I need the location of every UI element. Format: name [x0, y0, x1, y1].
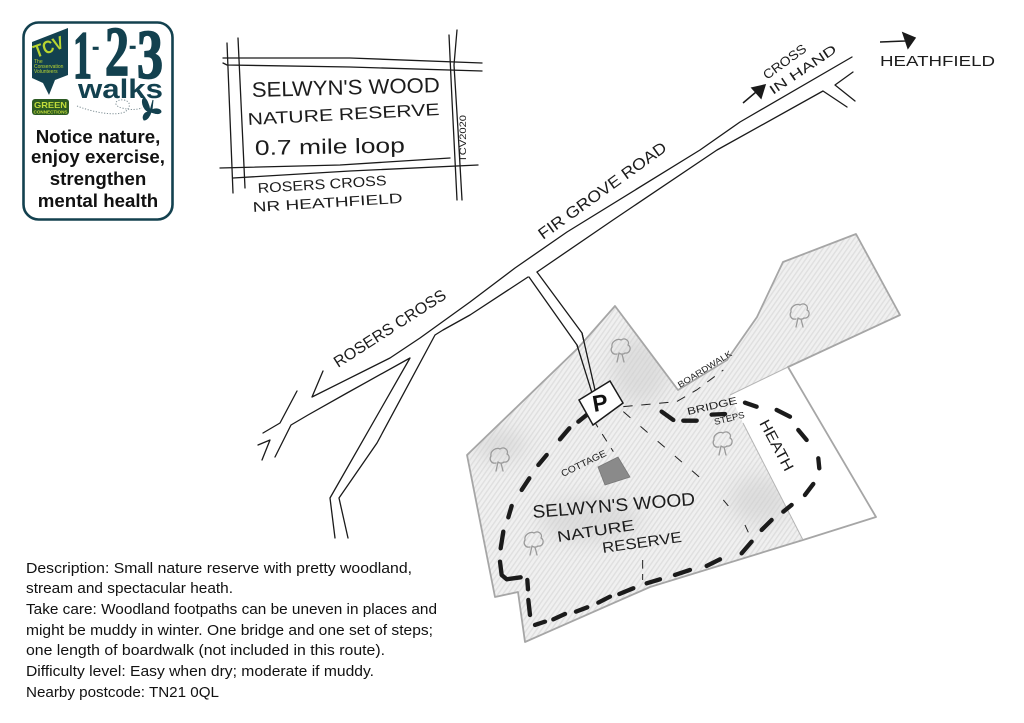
- tree icons: [490, 304, 809, 555]
- text block: route description: Take care: Woodland footpaths can be uneven in places and: [26, 601, 437, 618]
- subtitle text: NATURE RESERVE: [247, 100, 440, 129]
- slogan: mental health: [38, 190, 158, 211]
- slogan: strengthen: [50, 168, 146, 189]
- heath boundary: [730, 367, 803, 540]
- logo panel: 1-2-3 walks: [24, 14, 172, 220]
- icon: tree: [524, 532, 543, 555]
- reserve boundary: [467, 234, 900, 642]
- label: Steps: STEPS: [713, 410, 746, 427]
- slogan: enjoy exercise,: [31, 146, 165, 167]
- road network: [258, 57, 855, 538]
- side road at east end: [835, 72, 855, 101]
- direction: Heathfield: HEATHFIELD: [880, 53, 995, 70]
- direction: Cross in Hand: [743, 41, 839, 103]
- arrow: to Cross in Hand: [743, 85, 765, 103]
- badge: green connections: CONNECTIONS: [34, 110, 68, 114]
- road label: Fir Grove Road: FIR GROVE ROAD: [535, 139, 670, 243]
- wordmark: 1-2-3: 3: [137, 17, 163, 94]
- icon: TCV marker: TCV: [31, 32, 66, 62]
- slogan: Notice nature,: [36, 126, 160, 147]
- car park sign: P: [590, 389, 610, 417]
- location text 2: NR HEATHFIELD: [252, 190, 403, 215]
- location text: ROSERS CROSS: [257, 172, 387, 196]
- label: Boardwalk: BOARDWALK: [676, 348, 734, 390]
- text block: route description: might be muddy in winter. One bridge and one set of steps;: [26, 622, 433, 639]
- walking route: [500, 403, 819, 625]
- cottage: [598, 457, 630, 485]
- distance text: 0.7 mile loop: [255, 134, 405, 160]
- access road over reserve: [577, 333, 595, 393]
- arrow: to Heathfield: [880, 33, 915, 48]
- direction: Cross in Hand: IN HAND: [766, 41, 839, 97]
- Fir Grove Road lower edge: [275, 358, 410, 538]
- icon: tree: [713, 432, 732, 455]
- icon: tree: [611, 339, 630, 362]
- label: Bridge: BRIDGE: [686, 396, 739, 418]
- frame road lines: [220, 30, 482, 200]
- title text: SELWYN'S WOOD: [252, 74, 440, 102]
- wordmark: 1-2-3: -: [93, 39, 98, 56]
- west junction: [258, 391, 297, 460]
- icon: TCV marker: The: [34, 59, 43, 65]
- slogan: [31, 126, 165, 211]
- road label: Rosers Cross: ROSERS CROSS: [331, 287, 450, 371]
- credit text: TCV2020: [458, 115, 468, 162]
- car park sign: [579, 381, 623, 425]
- badge: green connections: GREEN: [34, 100, 67, 110]
- icon: TCV marker: [31, 28, 68, 95]
- darker pencil patches: [474, 336, 790, 542]
- icon: tree: [790, 304, 809, 327]
- icon: tree: [490, 448, 509, 471]
- Fir Grove Road upper edge: [312, 57, 852, 397]
- access road to car park: [529, 272, 595, 393]
- other footpaths: [593, 370, 748, 580]
- logo border: [24, 22, 172, 220]
- label: Nature: NATURE: [556, 517, 636, 546]
- branch road: [339, 91, 847, 538]
- title block: hand-drawn street frame: [220, 30, 482, 215]
- label: Reserve: RESERVE: [601, 529, 683, 557]
- text block: route description: [26, 560, 437, 701]
- wordmark: 1-2-3: 1: [73, 17, 92, 93]
- woodland shading: [467, 234, 900, 642]
- label: Cottage: COTTAGE: [559, 448, 608, 480]
- label: Selwyn's Wood: SELWYN'S WOOD: [532, 489, 696, 522]
- wordmark: walks: walks: [77, 74, 163, 104]
- label: Heath: HEATH: [755, 417, 797, 474]
- wordmark: 1-2-3: 2: [105, 14, 129, 91]
- icon: TCV marker: Volunteers: [34, 69, 58, 75]
- direction: Cross in Hand: CROSS: [760, 41, 809, 82]
- map: nature reserve: [467, 234, 900, 642]
- direction: Heathfield: [880, 33, 995, 70]
- wordmark: 1-2-3: [73, 14, 163, 94]
- badge: green connections: [32, 99, 69, 115]
- dotted butterfly trail: [77, 100, 142, 114]
- text block: route description: Nearby postcode: TN21 0QL: [26, 684, 219, 701]
- wordmark: 1-2-3: -: [130, 38, 135, 55]
- text block: route description: Description: Small nature reserve with pretty woodland,: [26, 560, 412, 577]
- icon: butterfly: [142, 98, 161, 120]
- icon: TCV marker: Conservation: [34, 64, 64, 70]
- text block: route description: one length of boardwalk (not included in this route).: [26, 642, 385, 659]
- text block: route description: stream and spectacular heath.: [26, 580, 233, 597]
- text block: route description: Difficulty level: Easy when dry; moderate if muddy.: [26, 663, 374, 680]
